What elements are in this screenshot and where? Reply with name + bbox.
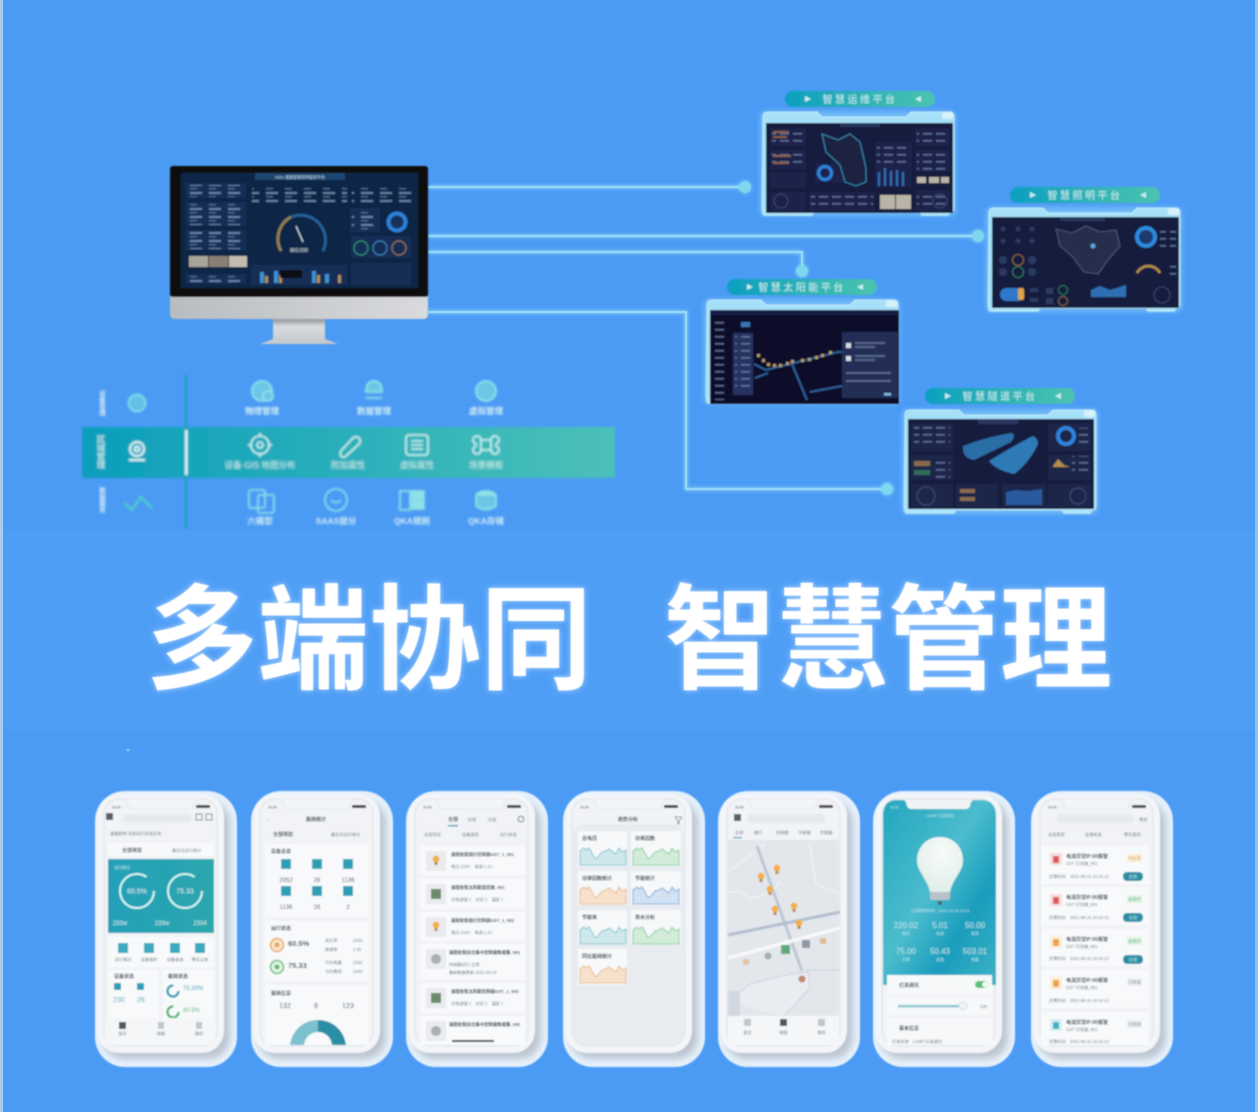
header: 全部类型 [1048, 831, 1065, 838]
lower stat cards: 80.5% [183, 1008, 201, 1014]
pill heading: 智慧运维平台 [822, 93, 898, 106]
card: device overview: 1136 [280, 905, 293, 911]
card: carbon reduction with donut chart [265, 985, 369, 1045]
chart card: flow [578, 910, 627, 945]
teal lamp hero: 电流 [936, 930, 944, 936]
teal status card [108, 859, 214, 933]
alarm card 3: 电流异常IP:00报警 [1066, 936, 1108, 943]
header tabs: 分组 [488, 816, 496, 823]
site selector: 全部项目 [122, 847, 142, 854]
device row 2: 光电流值 1 光伏 2 温度 1 [451, 896, 504, 903]
lower stat cards: 26 [137, 997, 145, 1004]
device row 6: 道路智能综合集中控制器数据集_002 [449, 1021, 521, 1028]
bottom row features: 六模型 [247, 516, 273, 526]
lower stat cards: 能耗状态 [168, 973, 188, 980]
header: 10:20 [1048, 806, 1057, 810]
chart card: summary [578, 949, 627, 985]
row labels: 设备管理 [98, 389, 106, 416]
teal lamp hero: 5.01 [932, 921, 948, 930]
alarm card 1: 告警时间 2021-06-15 15:24:12 [1049, 873, 1109, 880]
alarm card 3: 处理 [1129, 956, 1137, 962]
teal lamp hero: 50.43 [930, 947, 951, 956]
header [1048, 799, 1148, 838]
header: 处理状态 [1085, 831, 1102, 838]
teal lamp hero: 75.00 [896, 947, 917, 956]
card: running status: 2.35 [353, 947, 362, 952]
alarm card 2 [1041, 887, 1149, 925]
thumbnails [189, 256, 247, 267]
header: 路灯 [754, 829, 763, 836]
card: running status: 节约费用 [325, 968, 342, 975]
quick action icons: 运行情况 [115, 956, 132, 963]
alarm card 2: 告警时间 2021-06-15 15:24:12 [1049, 914, 1109, 921]
title [146, 548, 1112, 713]
top row features: 虚拟管理 [469, 406, 503, 416]
bottom row features: QKA存储 [468, 516, 504, 526]
vertical divider [184, 375, 188, 528]
row labels: 区域管理 [96, 435, 106, 469]
teal status card: 75.33 [176, 888, 194, 896]
alarm card 2: GST 灯控器_001 [1066, 901, 1098, 908]
alarm card 1: GST 灯控器_001 [1066, 860, 1098, 867]
chart card: energy: 功率因数统计 [582, 875, 612, 882]
monitor chin [170, 297, 428, 319]
alarm card 4: GST 灯控器_001 [1066, 984, 1098, 991]
header: 传感器 [820, 829, 833, 836]
device row 1 [420, 846, 525, 875]
status bar and search: 10:20 [112, 806, 121, 810]
light bulb [917, 837, 963, 905]
panel: platform feature matrix [82, 375, 615, 528]
title: 多端协同 [146, 548, 592, 713]
device row 3: 电压 220V 电流 1.2A [451, 929, 493, 936]
phone 1: home overview [95, 791, 237, 1067]
alarm card 3: 告警时间 2021-06-15 15:24:12 [1049, 955, 1109, 962]
device row 3 [420, 912, 525, 941]
teal lamp hero: 503.01 [963, 947, 988, 956]
control panels: 灯具调光 [899, 982, 919, 989]
teal lamp hero: 电压 [902, 930, 910, 936]
alarm card 4: 告警时间 2021-06-15 15:24:12 [1049, 997, 1109, 1004]
donut [388, 214, 406, 230]
tab bar: 地图 [779, 1029, 788, 1036]
panel: smart solar platform [704, 279, 900, 404]
header [580, 799, 682, 824]
header: 10:20 [735, 806, 744, 810]
device row 5: 光电流值 1 光伏 2 温度 1 [451, 1000, 504, 1007]
tab bar [105, 1018, 216, 1045]
header tabs: 设备类型 [462, 831, 479, 838]
dashboard screen [908, 419, 1094, 509]
lower stat cards: 75.33% [183, 986, 204, 992]
header tabs: 在线 [468, 816, 477, 822]
phone 6: lamp detail [873, 791, 1015, 1067]
card: running status: 节约电量 [325, 959, 342, 966]
alarm card 5: GST 灯控器_001 [1066, 1026, 1098, 1033]
alarm card 1: 电流异常IP:00报警 [1066, 853, 1108, 860]
teal status card: 运行概况 [114, 864, 130, 870]
quick action icons: 设备维护 [141, 956, 157, 963]
teal band [82, 427, 615, 478]
teal lamp hero: 220.02 [894, 921, 919, 930]
alarm card 4: 电流异常IP:00报警 [1066, 977, 1108, 984]
teal status card: 233w [113, 921, 128, 927]
tab bar: 首页 [743, 1029, 752, 1036]
bottom row features: QKA规则 [394, 516, 430, 526]
teal status card: 233w [155, 921, 170, 927]
alarm card 2: 处理 [1129, 914, 1137, 920]
control panels [887, 975, 992, 1045]
pill heading [1010, 187, 1160, 203]
middle row features: 虚拟属性 [400, 460, 434, 470]
chart card: saving: 用水分析 [635, 914, 655, 921]
chart card: saving [631, 910, 681, 945]
map markers [742, 865, 826, 982]
teal status card: 60.5% [127, 888, 147, 896]
teal lamp hero: 频率 [971, 930, 979, 936]
monitor screen dashboard: 2021 道路智能照明监控平台 [275, 174, 325, 180]
chart card: voltage [578, 831, 627, 866]
alarm card 3: GST 灯控器_001 [1066, 943, 1098, 950]
top row features: 数据管理 [357, 406, 391, 416]
device row 2: 道路智能太阳能监控箱_001 [451, 884, 505, 891]
pill heading [785, 91, 935, 107]
connector lines [428, 181, 984, 495]
phone 2: energy overview [251, 791, 393, 1067]
chart card: current [631, 831, 681, 866]
middle row features: 附加属性 [331, 460, 365, 470]
card: device overview: 2 [346, 905, 350, 911]
panel: smart tunnel platform [902, 388, 1098, 514]
alarm card 5: 电流异常IP:00报警 [1066, 1019, 1108, 1026]
quick action icons: 警告记录 [192, 956, 208, 963]
header [267, 799, 366, 838]
top row features: 物理管理 [245, 406, 279, 416]
lower stat cards [108, 970, 214, 1018]
device row 3: 道路智能路灯控制器GST_1_002 [451, 917, 515, 924]
map [728, 840, 840, 1016]
alarm card 5: 告警时间 2021-06-15 15:24:12 [1049, 1038, 1109, 1045]
panel: smart operations platform [760, 91, 956, 216]
phone 7: alarm list [1031, 791, 1173, 1067]
quick action icons: 设备查询 [167, 956, 183, 963]
alarm card 5: 已完成 [1128, 1020, 1141, 1028]
header: 10:20 [268, 806, 277, 810]
phone 4: trend charts [563, 791, 705, 1067]
header [733, 799, 833, 838]
teal lamp hero: 10:20 [890, 806, 899, 810]
monitor [170, 166, 428, 344]
phone 3: device list [406, 791, 548, 1067]
card: carbon reduction with donut chart: 能耗信息 [271, 990, 291, 997]
bottom row features: SAAS部分 [316, 516, 357, 526]
header tabs: 全部 [448, 816, 458, 823]
alarm card 5 [1041, 1012, 1149, 1045]
control panels: 灯具名称 LAMP 灯具调光 [892, 1038, 942, 1045]
teal lamp hero [883, 800, 996, 985]
small marker [125, 749, 131, 752]
header: 10:20 [580, 806, 589, 810]
card: running status: 运行状态 [271, 925, 291, 932]
speedometer gauge [278, 215, 325, 251]
dashboard screen [710, 310, 899, 404]
card: carbon reduction with donut chart: 123 [342, 1003, 354, 1010]
site selector: 最近月运行统计 [172, 847, 201, 854]
pill heading: 智慧隧道平台 [962, 390, 1038, 403]
middle row features: 场景模板 [469, 460, 503, 470]
card: device overview: 26 [314, 905, 321, 911]
card: carbon reduction with donut chart: 132 [279, 1003, 291, 1010]
tab bar: 地图 [157, 1030, 165, 1037]
pill heading [925, 388, 1075, 404]
card: running status: 亮灯率 [325, 937, 338, 944]
pill heading: 智慧太阳能平台 [758, 281, 846, 294]
title: 智慧管理 [664, 548, 1112, 713]
alarm card 1: 处理 [1129, 873, 1137, 879]
chart card: power: 节能统计 [635, 875, 655, 882]
chart card: current: 功率因数 [635, 835, 655, 842]
device row 1: 道路智能路灯控制器GST_1_001 [451, 851, 515, 858]
phone 5: device map [718, 791, 860, 1067]
site selector [108, 843, 214, 856]
tab bar [728, 1016, 839, 1045]
dashboard screen [766, 123, 953, 213]
header tabs [423, 799, 524, 838]
chart card: energy [578, 871, 627, 905]
teal lamp hero: 功率 [902, 956, 910, 962]
status bar and search [106, 799, 212, 837]
bottom row features [247, 489, 504, 526]
alarm card 3: 处理中 [1128, 938, 1141, 944]
header: 节能箱 [798, 829, 811, 836]
header tabs: 全部项目 [424, 831, 441, 838]
alarm card 2: 处理中 [1128, 896, 1141, 902]
middle row features [225, 433, 503, 470]
alarm card 3 [1041, 929, 1149, 966]
card: device overview [265, 844, 369, 917]
lower stat cards: 设备状态 [114, 973, 134, 980]
card: device overview: 1136 [342, 878, 355, 884]
device row 4: 道路智能综合集中控制器数据集_001 [449, 949, 521, 956]
header: 警告类型 [1124, 831, 1141, 838]
quick action icons [108, 937, 214, 967]
panel: smart lighting platform [986, 187, 1182, 312]
chart card: voltage: 总电压 [582, 835, 597, 842]
device row 4: 最新数据更新 2021-06-16 [449, 969, 497, 976]
monitor screen dashboard [181, 173, 418, 288]
teal lamp hero: LAMP 灯具调光 [926, 812, 954, 818]
header: 筛选 [1139, 816, 1148, 823]
card: running status: 故障率 [325, 946, 338, 953]
tab bar: 我的 [817, 1029, 826, 1036]
tab bar: 我的 [195, 1030, 203, 1037]
device row 4: 控制器运行 正常 [449, 961, 479, 968]
tab bar: 首页 [118, 1030, 127, 1037]
header: 趋势分析 [618, 816, 638, 823]
row labels: 数据服务 [98, 486, 106, 514]
lower stat cards: 230 [113, 997, 125, 1004]
header tabs: 10:20 [423, 806, 432, 810]
teal status card: 2334 [193, 921, 207, 927]
device row 5 [420, 983, 525, 1013]
middle row features: 设备·GIS 地图分布 [225, 460, 295, 470]
pill heading [727, 279, 877, 295]
teal lamp hero: 上次刷新时间：2021-12-30 10:21 [910, 907, 971, 913]
header: 全部 [735, 829, 743, 836]
gauges [354, 241, 406, 255]
card: device overview: 26 [314, 878, 321, 884]
device row 4 [420, 944, 525, 980]
header tabs: 运行状态 [500, 831, 517, 838]
card: running status: 2334 [353, 969, 363, 974]
alarm card 4 [1041, 970, 1149, 1008]
card: device overview: 设备总览 [271, 848, 291, 855]
card: carbon reduction with donut chart: 9 [314, 1003, 318, 1010]
pill heading: 智慧照明平台 [1048, 189, 1122, 202]
control panels: 基本信息 [899, 1025, 919, 1032]
header: 能耗统计 [306, 816, 326, 823]
chart card: summary: 同比能耗统计 [582, 953, 612, 960]
status bar and search: 道路照明 当前运行状态总览 [110, 830, 161, 837]
alarm card 1: 待处理 [1128, 854, 1142, 862]
monitor stand [260, 319, 338, 344]
device row 6 [420, 1016, 525, 1045]
header: 全部项目 [273, 831, 293, 838]
teal lamp hero: 亮度 [936, 956, 944, 962]
device row 5: 道路智能太阳能控制器GST_1_003 [451, 988, 519, 995]
header: 控制器 [776, 829, 789, 836]
dashboard screen [992, 217, 1179, 308]
card: running status: 2334 [353, 960, 363, 965]
card: running status [265, 921, 369, 981]
monitor bezel [170, 166, 428, 297]
alarm card 1 [1041, 846, 1149, 884]
row labels [96, 389, 106, 514]
card: device overview: 2052 [279, 878, 293, 884]
card: running status: 60.5% [288, 939, 310, 948]
alarm card 4: 已完成 [1128, 978, 1141, 986]
card: running status: 75.33 [288, 961, 307, 970]
chart card: power [631, 871, 681, 905]
header: 最近月运行统计 [331, 831, 360, 838]
monitor screen dashboard: 860,000 [290, 248, 308, 254]
card: running status: 2334 [353, 938, 363, 943]
bars [260, 271, 329, 283]
teal lamp hero: 电能 [971, 956, 979, 962]
device row 2 [420, 879, 525, 909]
chart card: flow: 节能率 [582, 914, 597, 921]
row icons [124, 394, 152, 510]
top row features [245, 381, 503, 416]
alarm card 2: 电流异常IP:00报警 [1066, 894, 1108, 901]
teal lamp hero: 50.00 [965, 921, 986, 930]
device row 1: 电压 220V 电流 1.2A [451, 863, 493, 870]
control panels: 100 [980, 1004, 988, 1009]
header: ‹ [267, 817, 269, 822]
